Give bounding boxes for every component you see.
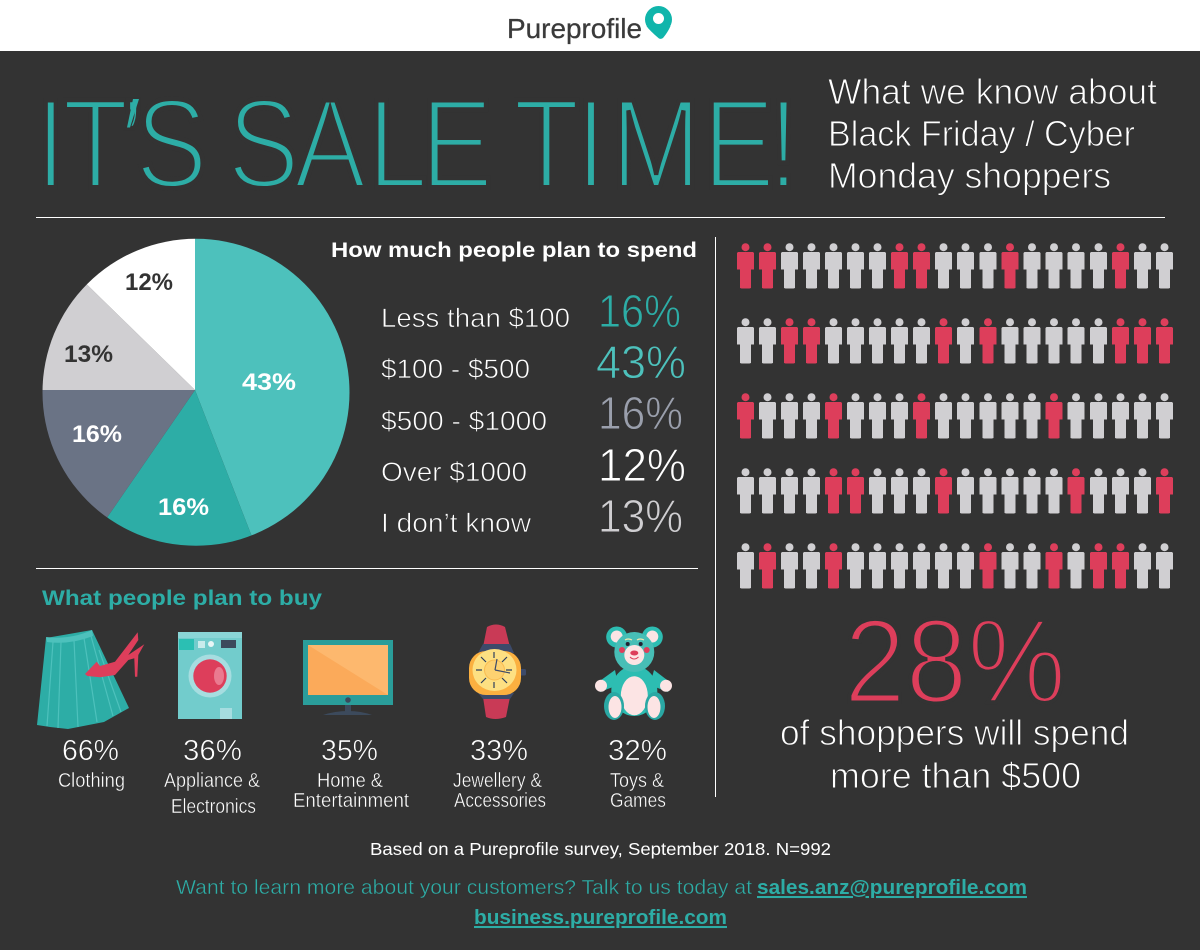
- jewellery label: [453, 770, 546, 812]
- row: $500 - $1000: $500 - $1000: [381, 406, 547, 436]
- home label: Entertainment: [293, 790, 409, 812]
- survey source note: Based on a Pureprofile survey, September 2018. N=992: [370, 839, 831, 859]
- item: appliance and electronics: [164, 632, 261, 818]
- toys percent: 32%: [608, 735, 667, 767]
- pictogram row 5: [737, 543, 1173, 588]
- pictogram row 3: [737, 393, 1173, 438]
- icon: high heel shoe: [85, 632, 144, 677]
- subtitle: Monday shoppers: [828, 155, 1111, 196]
- icon: washing machine: [178, 632, 242, 719]
- stat caption: [780, 712, 1129, 796]
- pie label 13%: 13%: [64, 341, 113, 368]
- row: over $1000: [381, 439, 686, 491]
- icon: skirt: [37, 630, 129, 729]
- subtitle: Black Friday / Cyber: [828, 113, 1135, 154]
- pie label 16% teal: 16%: [158, 494, 209, 521]
- icon: teddy bear: [595, 626, 672, 720]
- item: home and entertainment: [293, 640, 409, 812]
- appliance label: Appliance &: [164, 770, 261, 792]
- item: clothing: [37, 630, 144, 792]
- call to action: [176, 876, 1027, 929]
- row: $100 - $500: $100 - $500: [381, 354, 530, 384]
- row: $500 - $1000: [381, 387, 683, 439]
- toys label: Toys &: [610, 770, 665, 792]
- icon: television: [303, 640, 393, 715]
- row: less than $100: Less than $100: [381, 303, 570, 333]
- item: toys and games: [595, 626, 672, 812]
- appliance percent: 36%: [183, 735, 242, 767]
- big stat: 28%: 28%: [844, 594, 1066, 728]
- pictogram: 100 shoppers, 28 highlighted: [737, 243, 1173, 588]
- sales email: sales.anz@pureprofile.com: [757, 876, 1027, 899]
- toys label: Games: [610, 790, 666, 812]
- buy heading: What people plan to buy: [42, 587, 322, 610]
- spend table: [381, 285, 686, 542]
- pie label 12%: 12%: [125, 269, 173, 296]
- pie label 16% slate: 16%: [72, 421, 122, 448]
- clothing label: Clothing: [58, 770, 125, 792]
- row: I don't know: 13%: [598, 490, 683, 542]
- row: $100 - $500: 43%: [596, 336, 686, 388]
- logo wordmark: Pureprofile: [507, 13, 642, 44]
- pie chart: planned spend: [42, 238, 350, 546]
- pie label 43%: 43%: [242, 369, 296, 396]
- subtitle: [828, 71, 1157, 196]
- jewellery label: Accessories: [454, 790, 546, 812]
- clothing percent: 66%: [62, 735, 119, 767]
- jewellery percent: 33%: [470, 735, 528, 767]
- spend heading: How much people plan to spend: [331, 239, 697, 262]
- row: less than $100: [381, 285, 681, 337]
- title: IT’S SALE TIME!: [36, 72, 798, 214]
- appliance label: [164, 770, 261, 818]
- row: $100 - $500: [381, 336, 686, 388]
- row: over $1000: Over $1000: [381, 457, 527, 487]
- website: business.pureprofile.com: [474, 906, 727, 929]
- stat caption: more than $500: [830, 755, 1081, 796]
- subtitle: What we know about: [828, 71, 1157, 112]
- appliance label: Electronics: [171, 796, 256, 818]
- icon: location pin: [645, 6, 672, 39]
- row: I don't know: [381, 490, 683, 542]
- toys label: [610, 770, 666, 812]
- stat caption: of shoppers will spend: [780, 712, 1129, 753]
- home percent: 35%: [321, 735, 378, 767]
- call to action: Want to learn more about your customers? Talk to us today at: [176, 876, 752, 899]
- home label: Home &: [317, 770, 384, 792]
- row: I don't know: I don’t know: [381, 508, 532, 538]
- jewellery label: Jewellery &: [453, 770, 543, 792]
- row: less than $100: 16%: [598, 285, 681, 337]
- pictogram row 4: [737, 468, 1173, 514]
- pictogram row 1: [737, 243, 1173, 288]
- item: jewellery and accessories: [453, 624, 546, 812]
- logo header: [0, 0, 1200, 51]
- row: over $1000: 12%: [598, 439, 686, 491]
- home label: [293, 770, 409, 812]
- row: $500 - $1000: 16%: [598, 387, 683, 439]
- pictogram row 2: [737, 318, 1173, 364]
- icon: watch: [469, 624, 526, 719]
